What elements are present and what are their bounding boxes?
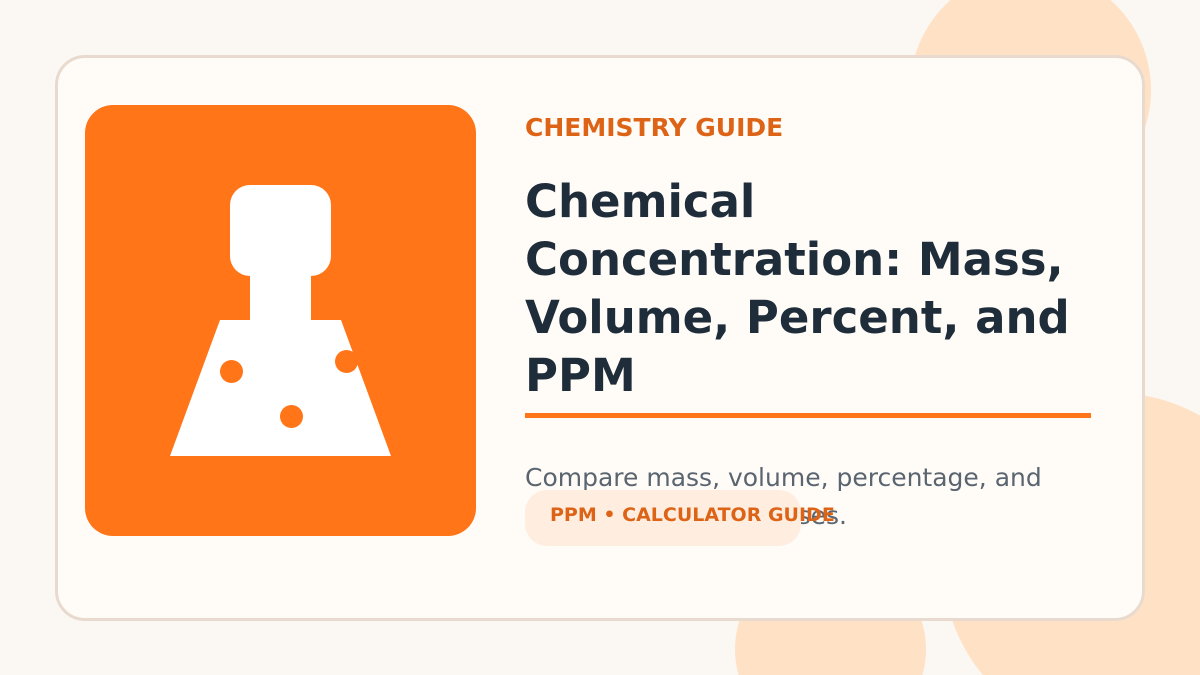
tag pill bbox=[525, 490, 801, 546]
subtitle text bbox=[525, 463, 1042, 530]
subtitle text: Compare mass, volume, percentage, and bbox=[525, 463, 1042, 492]
title underline bbox=[525, 413, 1091, 418]
kicker label: CHEMISTRY GUIDE bbox=[525, 113, 783, 142]
title: Chemical Concentration: Mass, Volume, Percent, and PPM bbox=[525, 175, 1070, 402]
panel: orange icon tile bbox=[85, 105, 476, 536]
panel: main card bbox=[55, 55, 1145, 621]
subtitle text: PPM concentration uses. bbox=[525, 501, 847, 530]
tag pill text: PPM • CALCULATOR GUIDE bbox=[550, 504, 835, 526]
